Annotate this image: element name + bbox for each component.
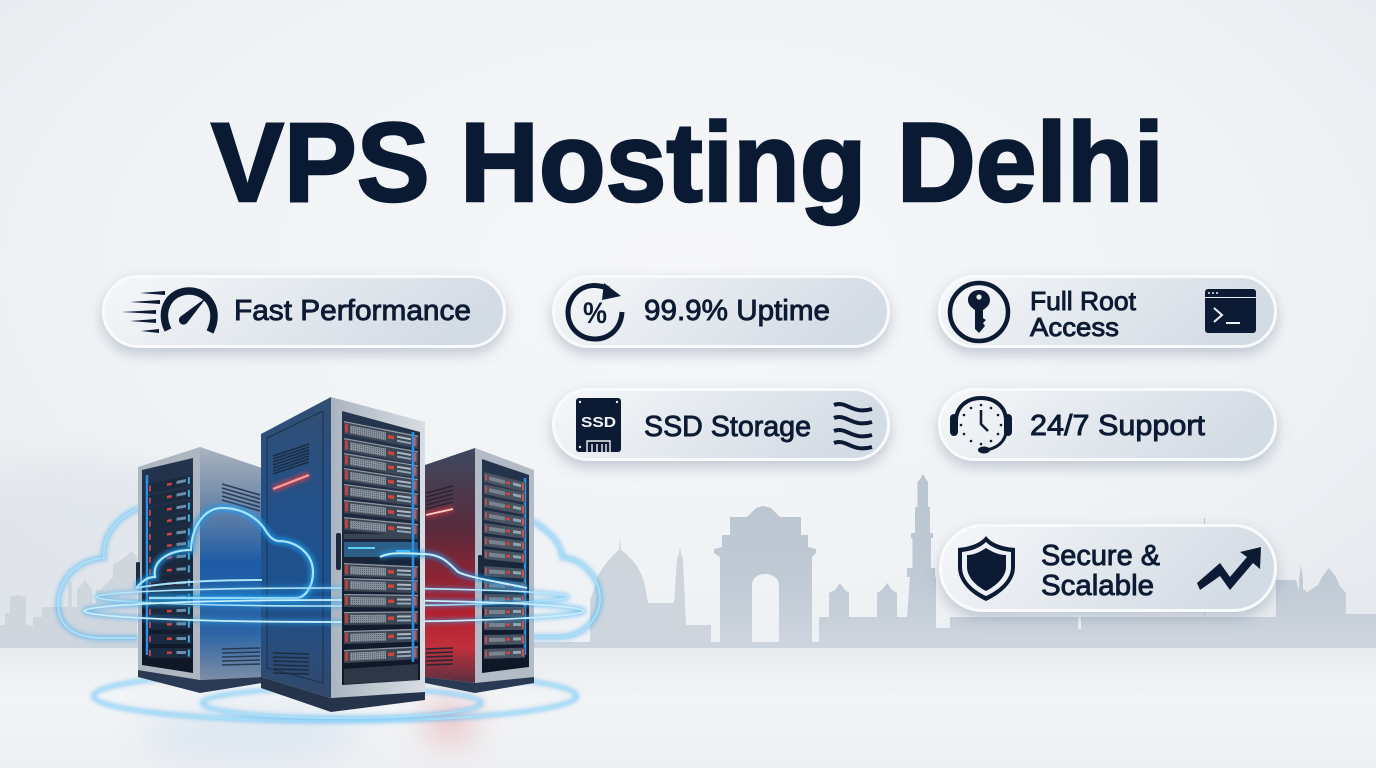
pill: Fast Performance [104, 276, 504, 346]
icon: speedometer [122, 291, 214, 333]
icon: key in circle [950, 283, 1008, 341]
Delhi skyline silhouette [0, 475, 1376, 648]
pill: Fast Performance: Fast Performance [234, 295, 471, 327]
icon: uptime percent [568, 283, 622, 339]
server rack: right [425, 448, 534, 693]
pill: Full Root Access: Full Root [1030, 286, 1137, 316]
pill: Secure & Scalable: Secure & [1041, 540, 1160, 572]
outer neon clouds [58, 508, 600, 638]
icon: data waves [834, 404, 872, 448]
Safdarjung dome and minaret [590, 537, 711, 648]
pill: Full Root Access [940, 276, 1276, 346]
neon cloud and rings [84, 508, 584, 622]
ground strip [0, 642, 1376, 648]
pill: 24/7 Support [940, 390, 1276, 460]
icon: headset with clock [950, 398, 1012, 454]
title: VPS Hosting Delhi [211, 100, 1164, 225]
pill: 99.9% Uptime [554, 276, 888, 346]
icon: terminal window [1205, 289, 1256, 333]
pill: Secure & Scalable [940, 526, 1276, 610]
pill: SSD Storage [554, 390, 888, 460]
pill: SSD Storage: SSD Storage [644, 411, 811, 443]
server rack: centre [261, 397, 425, 712]
icon: growth arrow [1197, 547, 1261, 590]
floor neon rings [93, 671, 577, 721]
icon: SSD drive: SSD [581, 414, 616, 431]
icon: SSD drive [576, 398, 621, 452]
pill: Full Root Access: Access [1030, 312, 1119, 342]
Qutub Minar and right skyline [819, 475, 1376, 648]
server rack: left [136, 447, 262, 693]
pill: 99.9% Uptime: 99.9% Uptime [644, 295, 830, 327]
India Gate [714, 506, 816, 642]
icon: shield [958, 536, 1015, 601]
floor [0, 648, 1376, 768]
left skyline [0, 551, 137, 648]
pill: Secure & Scalable: Scalable [1041, 570, 1154, 602]
icon: uptime percent: % [583, 297, 607, 330]
pill: 24/7 Support: 24/7 Support [1030, 410, 1205, 442]
